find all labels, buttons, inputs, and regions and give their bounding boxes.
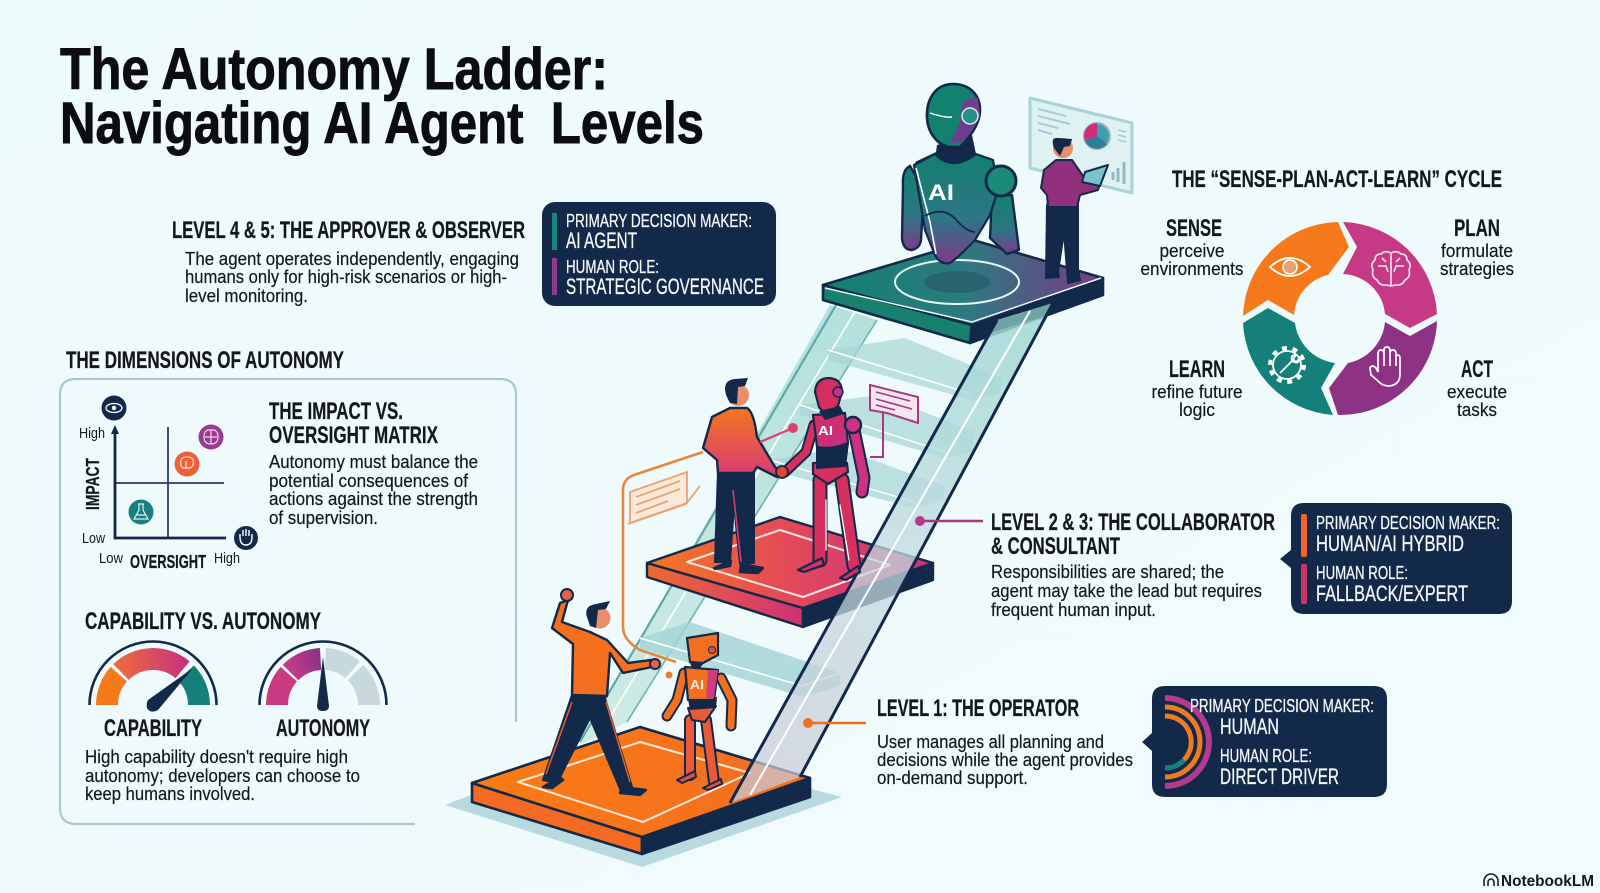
level 4 and 5 description: The agent operates independently, engaging <box>185 248 519 269</box>
label: learn: refine future <box>1152 381 1242 402</box>
label: learn: logic <box>1179 399 1215 420</box>
platform: level 4 and 5 <box>823 240 1103 343</box>
icon: plan circle <box>174 452 200 476</box>
matrix text <box>269 398 478 528</box>
icon: hand <box>234 526 258 550</box>
illustration: AI agent robot <box>902 84 1019 263</box>
level 4 and 5 description: LEVEL 4 & 5: THE APPROVER & OBSERVER <box>172 217 525 244</box>
illustration: level 2-3 robot: AI <box>818 423 833 438</box>
matrix text: potential consequences of <box>269 470 469 491</box>
capability text: keep humans involved. <box>85 783 255 804</box>
card: level 2 and 3 roles <box>1280 503 1512 614</box>
label: plan: PLAN <box>1454 215 1500 242</box>
label: sense: perceive <box>1160 240 1224 261</box>
label: sense: environments <box>1140 258 1244 279</box>
ladder: rungs <box>640 338 1002 697</box>
label: learn <box>1152 356 1242 420</box>
card: level 1 roles: DIRECT DRIVER <box>1220 764 1339 789</box>
level 1 description: User manages all planning and <box>877 731 1104 752</box>
capability text <box>85 746 360 804</box>
level 4 and 5 description: humans only for high-risk scenarios or high- <box>185 266 507 287</box>
title: The Autonomy Ladder: <box>60 37 608 102</box>
level 2 and 3 description: agent may take the lead but requires <box>991 580 1262 601</box>
card: level 1 roles: HUMAN <box>1220 714 1279 739</box>
segment: sense <box>1243 222 1349 316</box>
label: act: ACT <box>1461 356 1493 383</box>
label: sense: SENSE <box>1166 215 1222 242</box>
level 2 and 3 description <box>991 509 1275 620</box>
illustration: level 1 robot: AI <box>690 677 704 692</box>
matrix text: OVERSIGHT MATRIX <box>269 422 438 449</box>
chart: impact vs oversight matrix: High <box>79 426 105 442</box>
level 2 and 3 description: frequent human input. <box>991 599 1156 620</box>
card: level 4 and 5 roles: HUMAN ROLE: <box>566 257 659 277</box>
illustration: dashboard screen <box>1030 98 1132 193</box>
card: level 1 roles <box>1142 686 1387 797</box>
segment: act <box>1329 321 1437 415</box>
gauge: autonomy: AUTONOMY <box>276 715 370 742</box>
label: plan <box>1440 215 1514 279</box>
segment: plan <box>1343 222 1437 328</box>
card: level 1 roles: PRIMARY DECISION MAKER: <box>1190 696 1374 716</box>
card: level 1 roles: HUMAN ROLE: <box>1220 746 1312 766</box>
gauge: capability <box>90 642 216 742</box>
connector: pink handshake marker <box>760 423 798 442</box>
label: act <box>1447 356 1507 420</box>
title <box>60 37 704 156</box>
chart: impact vs oversight matrix: Low <box>99 551 123 567</box>
connector: orange guide line with note <box>623 452 703 678</box>
icon: brain <box>198 424 224 450</box>
platform: level 1 <box>445 727 842 867</box>
level 2 and 3 description: & CONSULTANT <box>991 533 1120 560</box>
gauge: capability: CAPABILITY <box>104 715 202 742</box>
chart: impact vs oversight matrix: Low <box>82 531 105 547</box>
card: level 4 and 5 roles: STRATEGIC GOVERNANCE <box>566 274 764 299</box>
capability text: autonomy; developers can choose to <box>85 765 360 786</box>
label: act: execute <box>1447 381 1507 402</box>
icon: concentric arcs <box>1165 698 1209 786</box>
illustration: AI agent robot: AI <box>928 180 954 205</box>
chart: impact vs oversight matrix: High <box>214 551 240 567</box>
logo: NotebookLM: NotebookLM <box>1501 873 1594 890</box>
level 2 and 3 description: Responsibilities are shared; the <box>991 561 1224 582</box>
matrix text: of supervision. <box>269 507 378 528</box>
capability text: High capability doesn't require high <box>85 746 348 767</box>
ladder: right rail <box>730 303 1053 803</box>
icon: flask <box>128 500 154 524</box>
level 4 and 5 description: level monitoring. <box>185 285 308 306</box>
connector: magenta speech bubble <box>870 385 918 457</box>
label: sense <box>1140 215 1244 279</box>
platform: level 2 and 3 <box>647 517 933 627</box>
card: level 4 and 5 roles: AI AGENT <box>566 228 637 253</box>
label: act: tasks <box>1457 399 1497 420</box>
level 1 description: decisions while the agent provides <box>877 749 1133 770</box>
card: level 2 and 3 roles: HUMAN ROLE: <box>1316 563 1408 583</box>
chart: impact vs oversight matrix: IMPACT <box>83 458 103 510</box>
level 1 description: on-demand support. <box>877 767 1028 788</box>
matrix text: actions against the strength <box>269 488 478 509</box>
level 1 description: LEVEL 1: THE OPERATOR <box>877 695 1079 722</box>
chart: cycle ring <box>1243 222 1437 415</box>
illustration: level 1 human <box>543 589 660 795</box>
segment: learn <box>1243 308 1335 415</box>
heading: capability vs autonomy: CAPABILITY VS. AUTONOMY <box>85 608 321 635</box>
illustration: human governor with tablet <box>1041 138 1108 283</box>
connector: level 2 and 3 marker <box>915 516 983 526</box>
label: learn: LEARN <box>1169 356 1225 383</box>
matrix text: THE IMPACT VS. <box>269 398 403 425</box>
level 4 and 5 description <box>172 217 525 306</box>
card: level 4 and 5 roles <box>542 202 776 306</box>
illustration: level 2-3 robot <box>776 378 864 580</box>
illustration: level 2-3 human <box>703 378 782 573</box>
card: level 2 and 3 roles: FALLBACK/EXPERT <box>1316 581 1468 606</box>
connector: level 1 marker <box>803 718 866 728</box>
label: plan: formulate <box>1441 240 1513 261</box>
heading: dimensions of autonomy: THE DIMENSIONS OF AUTONOMY <box>66 347 344 374</box>
chart: impact vs oversight matrix: OVERSIGHT <box>130 552 206 572</box>
gauge: autonomy <box>260 642 386 742</box>
icon: eye <box>102 396 126 420</box>
ladder: left rail <box>580 305 877 745</box>
level 1 description <box>877 695 1133 788</box>
matrix text: Autonomy must balance the <box>269 451 478 472</box>
card: level 2 and 3 roles: HUMAN/AI HYBRID <box>1316 531 1464 556</box>
panel: dimensions of autonomy <box>60 379 516 824</box>
card: level 2 and 3 roles: PRIMARY DECISION MAKER: <box>1316 513 1500 533</box>
card: level 4 and 5 roles: PRIMARY DECISION MAKER: <box>566 211 752 231</box>
level 2 and 3 description: LEVEL 2 & 3: THE COLLABORATOR <box>991 509 1275 536</box>
illustration: level 1 robot <box>667 633 732 790</box>
title: Navigating AI Agent Levels <box>60 91 704 156</box>
chart: impact vs oversight matrix <box>79 396 258 572</box>
label: plan: strategies <box>1440 258 1514 279</box>
